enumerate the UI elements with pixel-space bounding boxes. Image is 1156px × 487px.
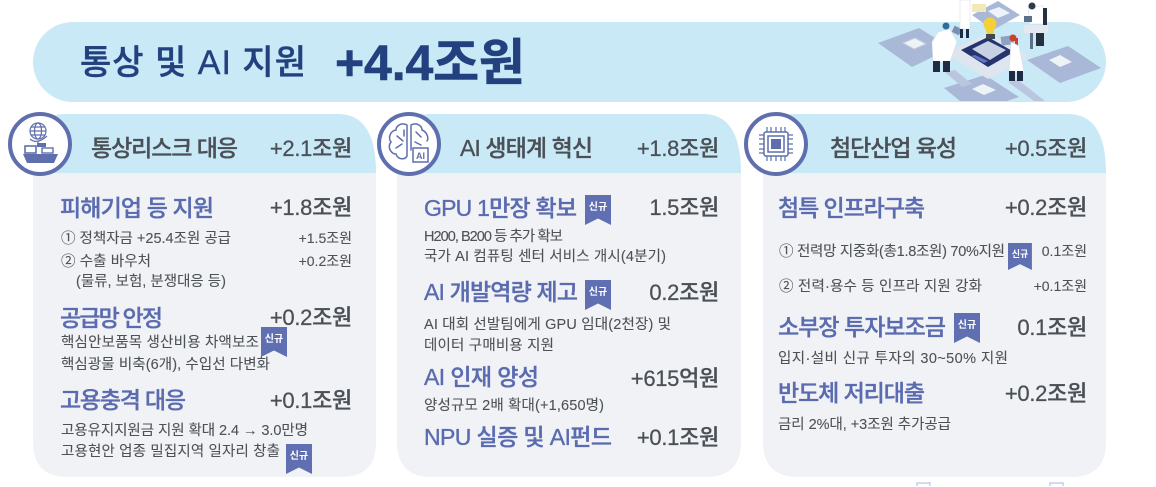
person front red hair <box>1001 34 1024 81</box>
section: AI 인재 양성: AI 인재 양성 <box>424 364 539 390</box>
icon: AI brain <box>379 114 439 174</box>
section: 소부장 투자보조금 <box>778 313 1087 367</box>
panel background <box>33 114 376 173</box>
panel heading: 첨단산업 육성 <box>830 135 957 161</box>
title: 통상 및 AI 지원 <box>80 44 306 82</box>
panel amount: +2.1조원 <box>270 136 352 161</box>
icon: semiconductor chip <box>746 114 806 174</box>
section: 고용충격 대응: 고용충격 대응 <box>60 387 186 413</box>
section: 반도체 저리대출: 반도체 저리대출 <box>778 380 925 406</box>
section: 피해기업 등 지원 <box>60 195 352 290</box>
section: AI 인재 양성: +615억원 <box>631 366 719 391</box>
section: 첨특 인프라구축: ① 전력망 지중화(총1.8조원) 70%지원 <box>779 243 1005 260</box>
illustration: researchers around a chip <box>878 0 1101 101</box>
section: AI 개발역량 제고 <box>424 279 719 354</box>
section: 반도체 저리대출 <box>778 380 1087 433</box>
section: 공급망 안정: 핵심광물 비축(6개), 수입선 다변화 <box>61 356 270 373</box>
section: AI 개발역량 제고: 데이터 구매비용 지원 <box>424 337 554 354</box>
badge: 신규 <box>585 195 611 225</box>
title banner <box>33 22 1106 102</box>
section: 첨특 인프라구축: +0.1조원 <box>1034 278 1087 294</box>
section: 소부장 투자보조금: 0.1조원 <box>1017 315 1087 340</box>
section: 반도체 저리대출: 금리 2%대, +3조원 추가공급 <box>778 416 951 433</box>
icon: globe and cargo ship <box>10 114 70 174</box>
section: 소부장 투자보조금: 입지·설비 신규 투자의 30~50% 지원 <box>778 350 1008 367</box>
person left <box>932 22 962 72</box>
panel: AI 생태계 혁신 <box>379 114 741 477</box>
section: NPU 실증 및 AI펀드: +0.1조원 <box>637 425 719 450</box>
total amount: +4.4조원 <box>335 35 525 91</box>
section: NPU 실증 및 AI펀드 <box>424 424 719 450</box>
section: GPU 1만장 확보: 1.5조원 <box>649 195 719 220</box>
icon: AI brain: AI <box>416 151 425 161</box>
section: AI 인재 양성 <box>424 364 719 414</box>
person right seated <box>1024 2 1048 49</box>
badge: 신규 <box>261 327 287 357</box>
section: 첨특 인프라구축: 첨특 인프라구축 <box>778 195 925 221</box>
section: 고용충격 대응: +0.1조원 <box>270 388 352 413</box>
panel heading: AI 생태계 혁신 <box>460 135 593 161</box>
section: 공급망 안정: +0.2조원 <box>270 305 352 330</box>
section: AI 개발역량 제고: AI 대회 선발팀에게 GPU 임대(2천장) 및 <box>424 316 671 333</box>
badge: 신규 <box>585 280 611 310</box>
panel amount: +1.8조원 <box>637 136 719 161</box>
panel heading: 통상리스크 대응 <box>91 135 238 161</box>
section: 첨특 인프라구축: +0.2조원 <box>1005 195 1087 220</box>
person top <box>960 0 986 38</box>
section: 공급망 안정: 공급망 안정 <box>60 305 163 331</box>
badge: 신규: 신규 <box>1012 248 1028 259</box>
section: 고용충격 대응: 고용유지지원금 지원 확대 2.4 → 3.0만명 <box>61 422 308 439</box>
badge: 신규: 신규 <box>958 318 976 331</box>
section: 고용충격 대응: 고용현안 업종 밀집지역 일자리 창출 <box>61 443 280 460</box>
section: 피해기업 등 지원: (물류, 보험, 분쟁대응 등) <box>76 273 226 290</box>
section: GPU 1만장 확보: GPU 1만장 확보 <box>424 195 577 221</box>
badge: 신규 <box>954 313 980 343</box>
section: 소부장 투자보조금: 소부장 투자보조금 <box>778 314 946 340</box>
section: NPU 실증 및 AI펀드: NPU 실증 및 AI펀드 <box>424 424 612 450</box>
section: 첨특 인프라구축: 0.1조원 <box>1042 243 1087 259</box>
panel amount: +0.5조원 <box>1005 136 1087 161</box>
section: GPU 1만장 확보: 국가 AI 컴퓨팅 센터 서비스 개시(4분기) <box>424 248 666 265</box>
section: 공급망 안정 <box>60 305 352 373</box>
section: 피해기업 등 지원: 피해기업 등 지원 <box>60 195 214 221</box>
section: AI 개발역량 제고: AI 개발역량 제고 <box>424 279 578 305</box>
badge: 신규: 신규 <box>265 332 283 345</box>
section: GPU 1만장 확보: H200, B200 등 추가 확보 <box>424 228 563 245</box>
section: AI 개발역량 제고: 0.2조원 <box>649 280 719 305</box>
section: 피해기업 등 지원: +1.5조원 <box>299 230 352 246</box>
section: 피해기업 등 지원: ① 정책자금 +25.4조원 공급 <box>61 230 231 247</box>
badge: 신규: 신규 <box>589 200 607 213</box>
panel: 첨단산업 육성 <box>746 114 1106 477</box>
badge: 신규 <box>1008 243 1032 270</box>
section: 피해기업 등 지원: +0.2조원 <box>299 253 352 269</box>
section: GPU 1만장 확보 <box>424 195 719 265</box>
section: 공급망 안정: 핵심안보품목 생산비용 차액보조 <box>61 334 259 351</box>
badge: 신규: 신규 <box>290 449 308 462</box>
badge: 신규 <box>286 444 312 474</box>
section: 피해기업 등 지원: +1.8조원 <box>270 195 352 220</box>
panel: 통상리스크 대응 <box>10 114 376 477</box>
section: 피해기업 등 지원: ② 수출 바우처 <box>61 253 151 270</box>
panel background <box>397 114 741 173</box>
section: 첨특 인프라구축: ② 전력·용수 등 인프라 지원 강화 <box>779 278 982 295</box>
badge: 신규: 신규 <box>589 285 607 298</box>
section: AI 인재 양성: 양성규모 2배 확대(+1,650명) <box>424 397 604 414</box>
section: 고용충격 대응 <box>60 387 352 474</box>
section: 반도체 저리대출: +0.2조원 <box>1005 381 1087 406</box>
panel background <box>763 114 1106 173</box>
section: 첨특 인프라구축 <box>778 195 1087 295</box>
